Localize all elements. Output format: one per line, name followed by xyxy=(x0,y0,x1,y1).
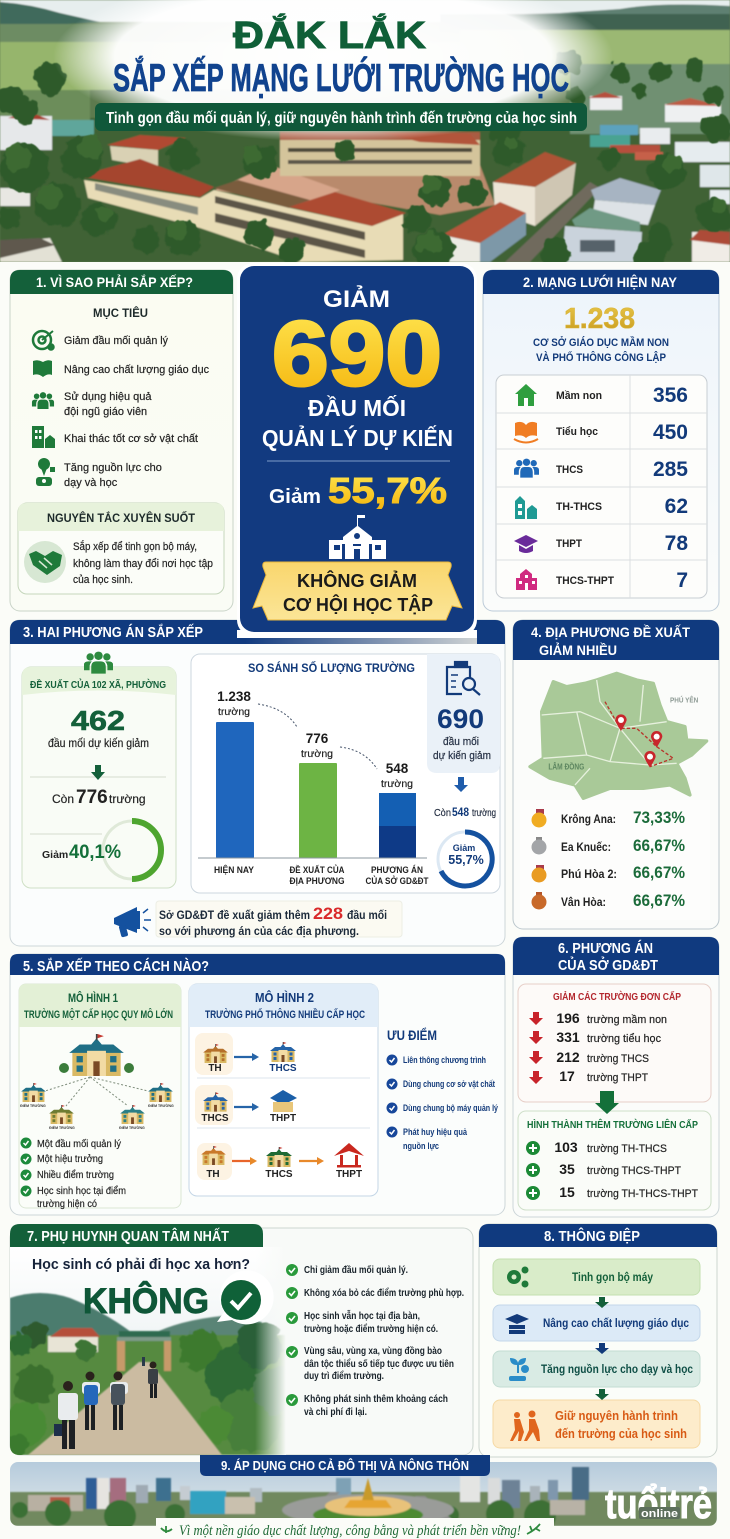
reassurance list: và chi phí đi lại. xyxy=(304,1407,367,1418)
row: THCS to THPT: THPT xyxy=(270,1113,296,1124)
message 2 xyxy=(493,1305,700,1341)
ribbon text 1: KHÔNG GIẢM xyxy=(297,570,417,591)
reassurance list: Không phát sinh thêm khoảng cách xyxy=(304,1394,448,1405)
remaining 548: 548 xyxy=(452,805,469,819)
labels: trường THCS-THPT xyxy=(587,1165,681,1177)
subheading: MỤC TIÊU xyxy=(93,305,148,320)
icon: check bubble xyxy=(217,1270,274,1324)
reassurance list: Học sinh vẫn học tại địa bàn, xyxy=(304,1311,420,1322)
gate xyxy=(117,1331,171,1371)
green box: new combined schools xyxy=(518,1111,711,1210)
model 1 bullets: Một đầu mối quản lý xyxy=(37,1138,122,1150)
panel 9: urban and rural banner xyxy=(10,1455,717,1539)
locality rows xyxy=(561,814,617,909)
advantages list xyxy=(386,1054,499,1152)
header 2 xyxy=(483,270,719,294)
back left building xyxy=(107,135,186,150)
model 1 bullets xyxy=(20,1138,126,1210)
white haze behind title xyxy=(53,0,613,142)
donut chart xyxy=(103,821,161,879)
model 1 bullets: trường hiện có xyxy=(37,1198,97,1210)
question: Học sinh có phải đi học xa hơn? xyxy=(32,1256,250,1273)
percent label: Giảm xyxy=(42,849,68,861)
callout line 1: Sở GD&ĐT đề xuất giảm thêm xyxy=(159,910,310,922)
header 9 text: 9. ÁP DỤNG CHO CẢ ĐÔ THỊ VÀ NÔNG THÔN xyxy=(221,1458,469,1473)
percent: Giảm xyxy=(269,486,321,508)
message 3 xyxy=(493,1351,700,1387)
icon: clipboard search xyxy=(447,662,480,695)
students xyxy=(54,1357,158,1449)
header 4 text: GIẢM NHIỀU xyxy=(539,642,617,658)
header 6 text: 6. PHƯƠNG ÁN xyxy=(558,940,653,957)
panel 5: how to arrange xyxy=(10,954,505,1215)
advantages xyxy=(386,1026,499,1152)
row: THCS xyxy=(514,458,688,481)
panel 2: current network xyxy=(483,270,719,611)
header 6 text: CỦA SỞ GD&ĐT xyxy=(558,956,658,974)
labels: trường TH-THCS-THPT xyxy=(587,1188,698,1200)
numbers: 212 xyxy=(556,1049,580,1065)
advantages list: Liên thông chương trình xyxy=(403,1055,486,1066)
header 7 text: 7. PHỤ HUYNH QUAN TÂM NHẤT xyxy=(27,1227,229,1245)
labels: trường tiểu học xyxy=(587,1033,661,1045)
panel 1: why rearrange xyxy=(10,270,233,611)
model 1 title: TRƯỜNG MỘT CẤP HỌC QUY MÔ LỚN xyxy=(24,1008,173,1021)
main building xyxy=(84,180,403,262)
donut label: Giảm xyxy=(453,843,475,853)
row: THCS-THPT: THCS-THPT xyxy=(556,575,614,587)
quản lý dự kiến: QUẢN LÝ DỰ KIẾN xyxy=(262,423,453,451)
goal text 5: dạy và học xyxy=(64,477,118,489)
row: THPT xyxy=(514,532,688,555)
number 690: 690 xyxy=(437,704,484,734)
icon: people group xyxy=(84,652,113,674)
arrow down xyxy=(91,765,105,780)
row: TH-THCS: 62 xyxy=(665,495,688,518)
flow arrows xyxy=(595,1297,609,1400)
advantages list: Phát huy hiệu quả xyxy=(403,1127,468,1138)
labels: trường THPT xyxy=(587,1072,648,1084)
row: TH to THCS: THCS xyxy=(269,1063,297,1074)
bar value labels: trường xyxy=(381,778,413,790)
labels: trường mầm non xyxy=(587,1014,667,1026)
numbers xyxy=(556,1010,580,1084)
row: TH to THCS to THPT: TH xyxy=(206,1169,220,1180)
icon: megaphone xyxy=(114,907,151,938)
numbers: 35 xyxy=(559,1161,575,1177)
map pins xyxy=(615,714,662,768)
numbers: 15 xyxy=(559,1184,575,1200)
axis labels: PHƯƠNG ÁN xyxy=(371,865,423,875)
row: Mầm non: Mầm non xyxy=(556,390,602,402)
plus icons xyxy=(526,1141,540,1200)
header 5 text: 5. SẮP XẾP THEO CÁCH NÀO? xyxy=(23,957,209,975)
model 1 bullets: Nhiều điểm trường xyxy=(37,1169,114,1181)
header 6 xyxy=(513,937,719,975)
icon: resources xyxy=(36,458,55,486)
labels: trường THCS xyxy=(587,1053,649,1065)
total caption: CƠ SỞ GIÁO DỤC MẦM NON xyxy=(533,336,669,349)
numbers: 17 xyxy=(559,1068,575,1084)
percent values: 66,67% xyxy=(633,864,685,882)
header 8 text: 8. THÔNG ĐIỆP xyxy=(544,1227,640,1245)
header 2 text: 2. MẠNG LƯỚI HIỆN NAY xyxy=(523,273,678,290)
bar value labels: trường xyxy=(218,706,250,718)
bar: department xyxy=(379,793,416,858)
donut blue xyxy=(438,832,492,886)
goal text 3: Sử dụng hiệu quả xyxy=(64,391,152,403)
header 9 xyxy=(200,1455,490,1476)
big number 690: 690 xyxy=(272,303,442,405)
advantages heading: ƯU ĐIỂM xyxy=(387,1026,437,1043)
goal text 1: Giảm đầu mối quản lý xyxy=(64,335,168,347)
row: THCS: THCS xyxy=(556,464,583,476)
locality rows: Krông Ana: xyxy=(561,814,616,826)
reassurance list: Không xóa bỏ các điểm trường phù hợp. xyxy=(304,1288,464,1299)
row: THPT: THPT xyxy=(556,538,582,550)
locality rows: Vân Hòa: xyxy=(561,897,606,909)
locality rows: Phú Hòa 2: xyxy=(561,869,617,881)
panel 4: localities with large reductions xyxy=(513,620,719,929)
row: TH to THCS xyxy=(195,1033,297,1075)
caption: đầu mối dự kiến giảm xyxy=(48,736,149,750)
percent label xyxy=(42,842,121,863)
photo: city skyline xyxy=(10,1462,717,1532)
remaining count: 776 xyxy=(76,787,108,808)
percent label: 40,1% xyxy=(69,842,121,863)
callout xyxy=(114,901,402,938)
bar value labels: 1.238 xyxy=(217,689,251,704)
remaining 548: Còn xyxy=(434,808,451,819)
message 2: Nâng cao chất lượng giáo dục xyxy=(543,1316,689,1330)
header 4 text: 4. ĐỊA PHƯƠNG ĐỀ XUẤT xyxy=(531,624,690,640)
logo online text: online xyxy=(641,1508,678,1520)
answer KHÔNG: KHÔNG xyxy=(83,1281,209,1321)
road xyxy=(28,1362,222,1455)
reassurance list: Chỉ giảm đầu mối quản lý. xyxy=(304,1265,408,1276)
arrow: big green xyxy=(595,1091,619,1114)
model 1 xyxy=(19,984,181,1210)
row: Mầm non: 356 xyxy=(653,384,688,407)
road xyxy=(505,182,600,262)
small building xyxy=(442,202,526,243)
reassurance list: dân tộc thiểu số tiếp tục được ưu tiên xyxy=(304,1359,454,1370)
callout line 1: 228 xyxy=(313,904,343,923)
trees xyxy=(0,49,730,274)
message 4: đến trường của học sinh xyxy=(555,1427,687,1441)
card heading: ĐỀ XUẤT CỦA 102 XÃ, PHƯỜNG xyxy=(30,678,166,691)
panel 7: parents' concern xyxy=(3,1224,473,1456)
numbers xyxy=(554,1139,578,1200)
row: TH-THCS xyxy=(515,495,688,519)
slogan: Vì một nền giáo dục chất lượng, công bằng và phát triển bền vững! xyxy=(179,1523,521,1539)
grey buildings xyxy=(591,178,661,205)
donut label xyxy=(448,843,484,867)
row: THPT: 78 xyxy=(665,532,688,555)
bar value labels: 776 xyxy=(306,731,329,746)
advantages list: Dùng chung bộ máy quản lý xyxy=(403,1103,499,1114)
map xyxy=(530,673,707,798)
row: THCS to THPT xyxy=(195,1085,297,1125)
model 2 xyxy=(189,984,378,1196)
number 462: 462 xyxy=(71,705,125,736)
satellite labels: ĐIỂM TRƯỜNG xyxy=(148,1103,174,1108)
row: TH to THCS to THPT xyxy=(197,1143,364,1180)
goal text 3: đội ngũ giáo viên xyxy=(64,406,147,418)
satellite labels: ĐIỂM TRƯỜNG xyxy=(119,1125,145,1130)
subtitle text: Tinh gọn đầu mối quản lý, giữ nguyên hành trình đến trường của học sinh xyxy=(106,110,577,127)
row: TH to THCS to THPT: THPT xyxy=(336,1169,362,1180)
central blue highlight panel xyxy=(237,263,477,644)
numbers: 196 xyxy=(556,1010,580,1026)
header 1 text: 1. VÌ SAO PHẢI SẮP XẾP? xyxy=(36,273,193,290)
percent values: 73,33% xyxy=(633,809,685,827)
numbers: 103 xyxy=(554,1139,578,1155)
goal text 4: Khai thác tốt cơ sở vật chất xyxy=(64,433,198,445)
goal text 5: Tăng nguồn lực cho xyxy=(64,462,162,474)
table xyxy=(496,375,707,598)
message 3: Tăng nguồn lực cho dạy và học xyxy=(541,1362,693,1376)
photo: students walking to school xyxy=(3,1247,298,1456)
satellite schools xyxy=(21,1083,173,1124)
message 1 xyxy=(493,1259,700,1295)
title block xyxy=(95,13,587,131)
medal 4 xyxy=(532,892,546,910)
row: THCS-THPT: 7 xyxy=(676,569,688,592)
axis labels xyxy=(214,864,429,886)
row: Tiểu học: 450 xyxy=(653,421,688,444)
percent values: 66,67% xyxy=(633,892,685,910)
principle box xyxy=(18,503,224,594)
row dividers xyxy=(197,1078,370,1128)
icon: handshake xyxy=(24,541,66,583)
callout line 1: đầu mối xyxy=(347,910,387,922)
message 4 xyxy=(493,1400,700,1448)
labels xyxy=(587,1014,667,1084)
header 3 text: 3. HAI PHƯƠNG ÁN SẮP XẾP xyxy=(23,623,203,641)
row: THCS-THPT xyxy=(516,569,688,592)
icon: buildings xyxy=(32,426,55,448)
header 8 xyxy=(479,1224,717,1247)
caption 690: dự kiến giảm xyxy=(433,750,491,762)
row: Mầm non xyxy=(515,384,688,407)
divider xyxy=(30,833,102,835)
model 1 bullets: Học sinh học tại điểm xyxy=(37,1185,126,1197)
row: THCS to THPT: THCS xyxy=(201,1113,229,1124)
dashed arrows xyxy=(258,704,377,769)
message 1: Tinh gọn bộ máy xyxy=(572,1270,653,1284)
reassurance list xyxy=(286,1264,464,1418)
đầu mối: ĐẦU MỐI xyxy=(308,394,406,421)
map: LÂM ĐỒNG xyxy=(548,761,584,771)
chart title: SO SÁNH SỐ LƯỢNG TRƯỜNG xyxy=(248,660,415,675)
axis labels: ĐỊA PHƯƠNG xyxy=(290,876,344,886)
header 7 xyxy=(10,1224,263,1247)
total caption: VÀ PHỔ THÔNG CÔNG LẬP xyxy=(536,351,666,364)
foliage xyxy=(3,1322,298,1456)
principle heading: NGUYÊN TẮC XUYÊN SUỐT xyxy=(47,510,196,525)
axis labels: HIỆN NAY xyxy=(214,864,254,875)
row: THCS: 285 xyxy=(653,458,688,481)
GIẢM: GIẢM xyxy=(323,284,390,313)
row: TH to THCS to THPT: THCS xyxy=(265,1169,293,1180)
principle text: không làm thay đổi nơi học tập xyxy=(73,558,213,570)
ribbon text 2: CƠ HỘI HỌC TẬP xyxy=(283,594,433,615)
right side background xyxy=(427,654,500,773)
satellite labels: ĐIỂM TRƯỜNG xyxy=(20,1103,46,1108)
comparison chart card xyxy=(191,654,500,893)
remaining count: Còn xyxy=(52,792,74,806)
numbers: 331 xyxy=(556,1029,580,1045)
ribbon xyxy=(253,562,462,620)
panel 8: message xyxy=(479,1224,717,1457)
axis xyxy=(198,857,427,859)
bar: local xyxy=(299,763,337,858)
header 1 xyxy=(10,270,233,294)
satellite labels: ĐIỂM TRƯỜNG xyxy=(49,1125,75,1130)
reassurance list: Vùng sâu, vùng xa, vùng đồng bào xyxy=(304,1346,442,1357)
icon: target xyxy=(33,331,54,350)
percent: 55,7% xyxy=(328,470,447,511)
icon: teachers xyxy=(32,392,54,409)
green box title: HÌNH THÀNH THÊM TRƯỜNG LIÊN CẤP xyxy=(527,1118,698,1131)
row: Tiểu học xyxy=(514,421,688,444)
percent xyxy=(269,470,447,511)
satellite labels xyxy=(20,1103,174,1130)
arrow down blue xyxy=(454,777,468,792)
row: TH-THCS: TH-THCS xyxy=(556,501,602,513)
message 4: Giữ nguyên hành trình xyxy=(555,1409,678,1423)
principle text: Sắp xếp để tinh gọn bộ máy, xyxy=(73,540,197,553)
bar: current xyxy=(216,722,254,858)
stat list xyxy=(520,800,710,920)
advantages list: nguồn lực xyxy=(403,1141,439,1152)
remaining 548 xyxy=(434,805,496,819)
right building xyxy=(493,152,576,187)
courtyard xyxy=(301,166,495,216)
reassurance list: duy trì điểm trường. xyxy=(304,1371,384,1382)
red box: single level reductions xyxy=(518,984,711,1102)
axis labels: ĐỀ XUẤT CỦA xyxy=(290,864,345,875)
panel 3: two options xyxy=(10,620,505,946)
slogan strip xyxy=(156,1518,554,1539)
remaining count: trường xyxy=(109,792,146,806)
village xyxy=(0,116,52,150)
row: TH to THCS: TH xyxy=(208,1063,222,1074)
red box title: GIẢM CÁC TRƯỜNG ĐƠN CẤP xyxy=(553,990,681,1003)
row: Tiểu học: Tiểu học xyxy=(556,426,598,438)
remaining 548: trường xyxy=(472,808,496,819)
header 3 xyxy=(10,620,505,644)
bar value labels: trường xyxy=(301,748,333,760)
header 4 xyxy=(513,620,719,660)
red arrows xyxy=(529,1012,543,1084)
reassurance list: trường hoặc điểm trường hiện có. xyxy=(304,1324,438,1335)
hero: aerial photo of school xyxy=(0,0,730,274)
logo online xyxy=(639,1507,680,1519)
goal text 2: Nâng cao chất lượng giáo dục xyxy=(64,364,209,376)
caption 690: đầu mối xyxy=(443,736,479,748)
principle text: của học sinh. xyxy=(73,574,133,586)
medal 1 xyxy=(532,809,546,828)
total number: 1.238 xyxy=(564,303,635,335)
percent values: 66,67% xyxy=(633,837,685,855)
title line 1: ĐẮK LẮK xyxy=(233,13,427,57)
panel 6: department plan xyxy=(513,937,719,1217)
divider xyxy=(267,460,450,462)
header 5 xyxy=(10,954,505,975)
model 2 title: MÔ HÌNH 2 xyxy=(255,990,314,1005)
axis labels: CỦA SỞ GD&ĐT xyxy=(366,875,429,886)
percent values xyxy=(633,809,685,910)
donut label: 55,7% xyxy=(448,853,484,867)
network lines xyxy=(45,1077,148,1106)
labels: trường TH-THCS xyxy=(587,1143,667,1155)
callout line 2: so với phương án của các địa phương. xyxy=(159,926,359,938)
divider line xyxy=(30,776,166,778)
icon: school xyxy=(329,515,386,559)
main school xyxy=(59,1034,134,1076)
callout line 1 xyxy=(159,904,387,923)
icon: sprigs xyxy=(161,1524,540,1534)
bar value labels xyxy=(217,689,413,790)
model 1 bullets: Một hiệu trưởng xyxy=(37,1153,103,1165)
local proposal card xyxy=(22,652,176,888)
subtitle pill xyxy=(95,103,587,131)
model 1 title: MÔ HÌNH 1 xyxy=(68,992,119,1005)
icon: book xyxy=(33,360,52,377)
locality rows: Ea Knuếc: xyxy=(561,842,611,854)
labels xyxy=(587,1143,698,1200)
back building xyxy=(280,138,480,176)
medal 3 xyxy=(532,865,546,882)
model 2 title: TRƯỜNG PHỔ THÔNG NHIỀU CẤP HỌC xyxy=(205,1008,365,1021)
medal 2 xyxy=(532,837,546,854)
bar value labels: 548 xyxy=(386,761,409,776)
advantages list: Dùng chung cơ sở vật chất xyxy=(403,1079,496,1090)
map labels: PHÚ YÊN xyxy=(670,695,698,704)
